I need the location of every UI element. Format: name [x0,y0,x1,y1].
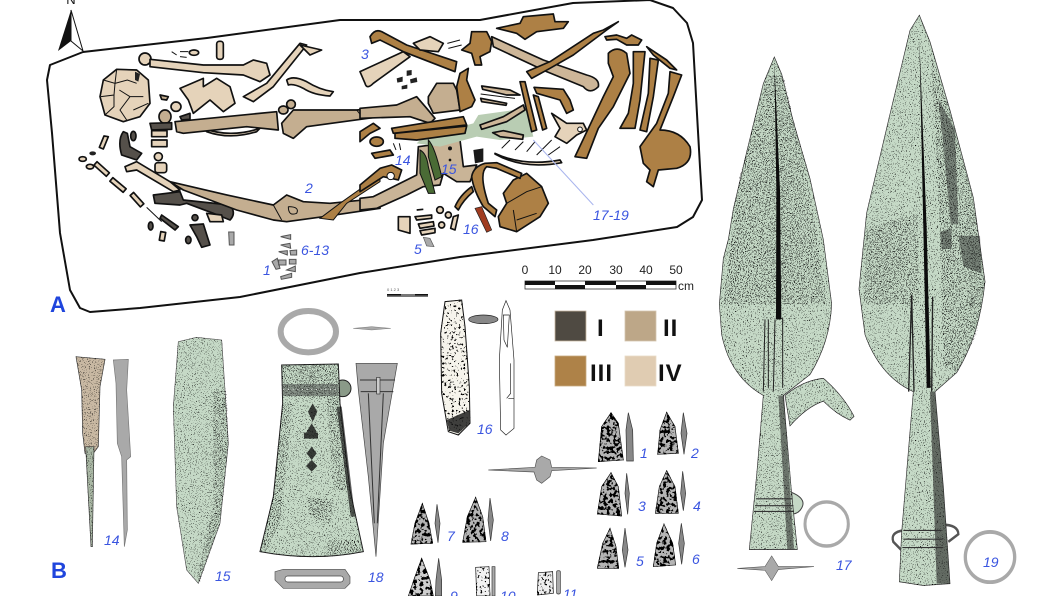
scale bar 50 cm: 30 [609,263,623,277]
artefact 16 pebble [441,300,514,435]
spearhead 19 [859,15,985,586]
spearhead 17 [719,57,854,549]
upper arm bones [139,41,333,102]
legend: I [597,315,605,342]
panel B centre artefacts [408,300,687,596]
scale bar 50 cm: 40 [639,263,653,277]
panel B labels: 14 [104,532,120,548]
icon: north arrow [58,0,83,51]
panel B labels: 18 [368,569,384,585]
artefact: green blades and red awl [420,140,492,232]
panel B labels: 8 [501,528,509,544]
panel B labels: 19 [983,554,999,570]
legend: IV [658,360,683,387]
scale bar 50 cm: cm [678,279,694,293]
legend: III [590,360,613,387]
axe bottom section [275,569,350,588]
ring 19 [965,532,1015,582]
panel B labels: 16 [477,421,493,437]
artefact 15 blade [173,337,228,583]
dark bones [120,131,233,247]
green patina zone [417,108,533,147]
panel B left artefacts [76,311,397,588]
ring 17 [805,502,848,546]
burial plan labels: 5 [414,241,422,257]
scale bar 50 cm: 20 [578,263,592,277]
burial plan labels: 6-13 [301,242,329,258]
central brown bones [392,68,587,165]
panel B labels: 7 [447,528,456,544]
panel B labels: 15 [215,568,231,584]
skeleton left part [79,41,380,279]
legend: II [663,315,678,342]
axe ring section [281,311,336,352]
burial plan labels: 17-19 [593,207,629,223]
panel B labels: 4 [693,498,701,514]
scale bar 50 cm [522,263,694,293]
burial plan labels: 15 [441,161,457,177]
panel B labels: 6 [692,551,700,567]
scale bar 50 cm: 50 [669,263,683,277]
burial plan labels: 2 [304,180,313,196]
legend [555,311,683,387]
femur and tibia [175,100,380,138]
scale bar 50 cm: 10 [548,263,562,277]
panel label A: A [50,292,66,317]
scale bar 50 cm: 0 [522,263,529,277]
brown bones top [360,14,618,91]
artefact 18 axe [260,364,363,557]
arrowheads 7 to 11 [408,497,560,596]
arrowheads 1 to 6 [597,412,687,568]
burial plan labels: 1 [263,262,271,278]
burial plan labels: 3 [361,46,369,62]
arrowhead section [488,456,597,483]
section 17 [737,556,814,581]
pelvis light [150,78,235,147]
panel B labels [104,421,999,596]
central pelvis and femur [360,83,477,210]
burial plan labels: 16 [463,221,479,237]
panel B labels: 3 [638,498,646,514]
burial plan labels: 14 [395,152,411,168]
panel label B: B [51,558,67,583]
panel A: grave plan outline [47,0,702,312]
burial plan labels [263,46,629,278]
axe side section [353,327,391,330]
small scale bar: 0 1 2 3 [387,287,400,292]
panel B labels: 17 [836,557,853,573]
panel B labels: 2 [690,445,699,461]
artefact 14 awl [76,357,131,547]
panel B spearheads [719,15,1015,586]
hip bones lower [360,123,548,247]
long bones lower left [125,153,380,222]
leader line [533,140,593,205]
brown bones right [575,35,691,187]
small scale bar [387,287,428,297]
skull [100,69,150,122]
axe gray profile [356,363,397,557]
panel B labels: 5 [636,553,644,569]
skeleton right part [360,14,691,247]
small bones and gray flints [79,136,297,279]
panel B labels: 1 [640,445,648,461]
